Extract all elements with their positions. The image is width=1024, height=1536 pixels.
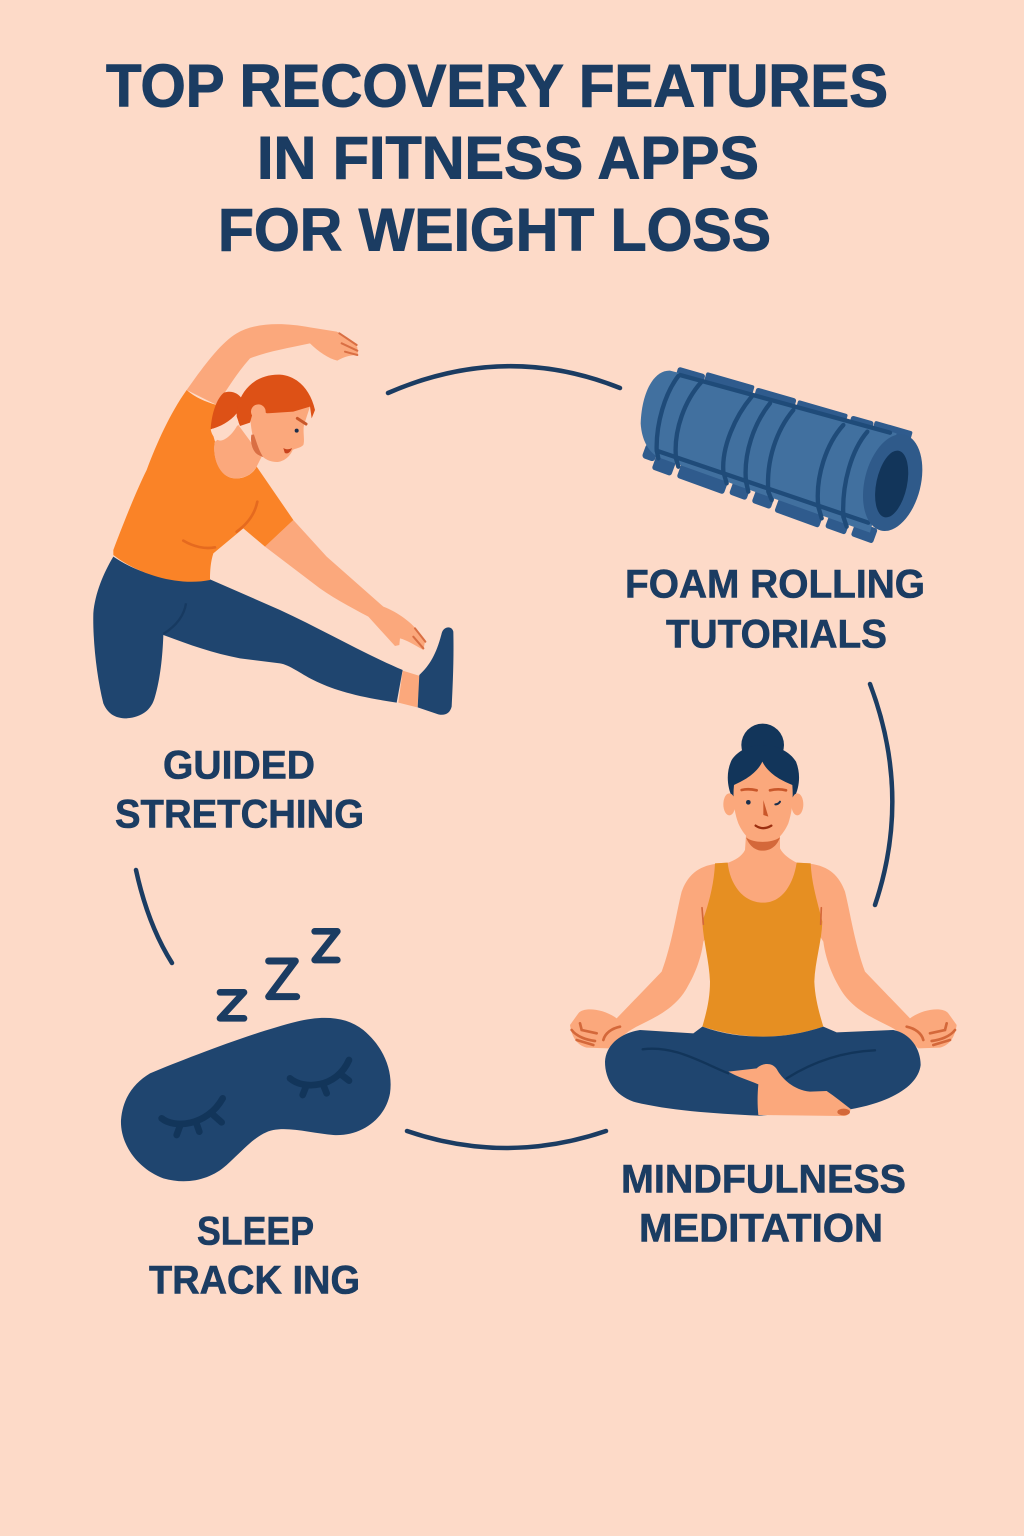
mouth (756, 826, 771, 828)
shirt (113, 390, 293, 582)
label: foam rolling tutorials (625, 562, 925, 656)
label: sleep tracking: TRACK ING (149, 1258, 360, 1302)
fingers (339, 333, 425, 648)
title: FOR WEIGHT LOSS (218, 196, 771, 264)
title: TOP RECOVERY FEATURES (106, 52, 888, 120)
foot (728, 1064, 851, 1116)
hair bun (741, 724, 784, 766)
icon: sleep mask with z letters (121, 931, 391, 1181)
face (250, 407, 310, 462)
finger lines (572, 1023, 955, 1045)
right arm and hand (807, 863, 957, 1048)
top blocks (676, 367, 913, 445)
label: sleep tracking: SLEEP (197, 1210, 314, 1254)
label: mindfulness meditation: MEDITATION (639, 1206, 883, 1250)
mouth (283, 448, 292, 453)
icon: woman stretching (93, 324, 454, 718)
icon: woman meditating (570, 724, 957, 1116)
mask (121, 1018, 391, 1181)
title: IN FITNESS APPS (257, 124, 759, 192)
hair (728, 745, 799, 798)
label: foam rolling tutorials: TUTORIALS (666, 612, 887, 656)
right ear (791, 793, 803, 815)
small z (220, 992, 244, 1018)
label: mindfulness meditation: MINDFULNESS (621, 1158, 906, 1202)
label: guided stretching: GUIDED (163, 744, 315, 788)
left arm and hand (570, 863, 720, 1048)
label: foam rolling tutorials: FOAM ROLLING (625, 562, 925, 606)
nose (763, 800, 768, 817)
roller hole (870, 448, 914, 520)
hair (237, 375, 315, 426)
ankle (398, 671, 420, 707)
bottom blocks (642, 443, 878, 544)
leggings (93, 557, 403, 718)
neck shadow (746, 837, 780, 851)
ponytail (211, 392, 242, 429)
jaw shadow (252, 435, 260, 454)
label: guided stretching: STRETCHING (115, 792, 364, 836)
arrow: meditation to sleep (407, 1131, 606, 1148)
leg fold (163, 603, 186, 634)
eyebrow (297, 418, 306, 424)
arrow: stretching to foam rolling (388, 366, 620, 393)
eye right (775, 802, 780, 804)
right eye lashes (290, 1060, 349, 1095)
leggings (605, 1027, 921, 1116)
foot (418, 627, 454, 715)
label: guided stretching (115, 744, 364, 836)
middle z (269, 961, 297, 997)
tank top (702, 863, 823, 1037)
eye left (746, 800, 751, 805)
raised arm (187, 324, 358, 405)
armpit shadows (702, 908, 821, 924)
label: sleep tracking (149, 1210, 360, 1302)
label: mindfulness meditation (621, 1158, 906, 1250)
arrow: sleep to stretching (136, 870, 172, 963)
torso skin (707, 835, 820, 942)
title (106, 52, 888, 264)
roller end rim (854, 428, 932, 537)
leg creases (643, 1049, 875, 1078)
shirt folds (183, 502, 257, 548)
background gap (211, 413, 237, 441)
large z (315, 931, 337, 960)
arrow: foam rolling to meditation (870, 684, 892, 905)
face (734, 762, 793, 845)
roller body (641, 371, 897, 533)
eye (295, 429, 299, 433)
ears (723, 793, 735, 815)
reaching arm (265, 520, 425, 650)
ear (251, 404, 266, 419)
neck (214, 425, 262, 478)
icon: foam roller (641, 367, 932, 544)
toenail (837, 1109, 850, 1115)
eyebrows (742, 789, 786, 790)
ridge lines (657, 375, 890, 527)
left eye lashes (162, 1098, 223, 1135)
